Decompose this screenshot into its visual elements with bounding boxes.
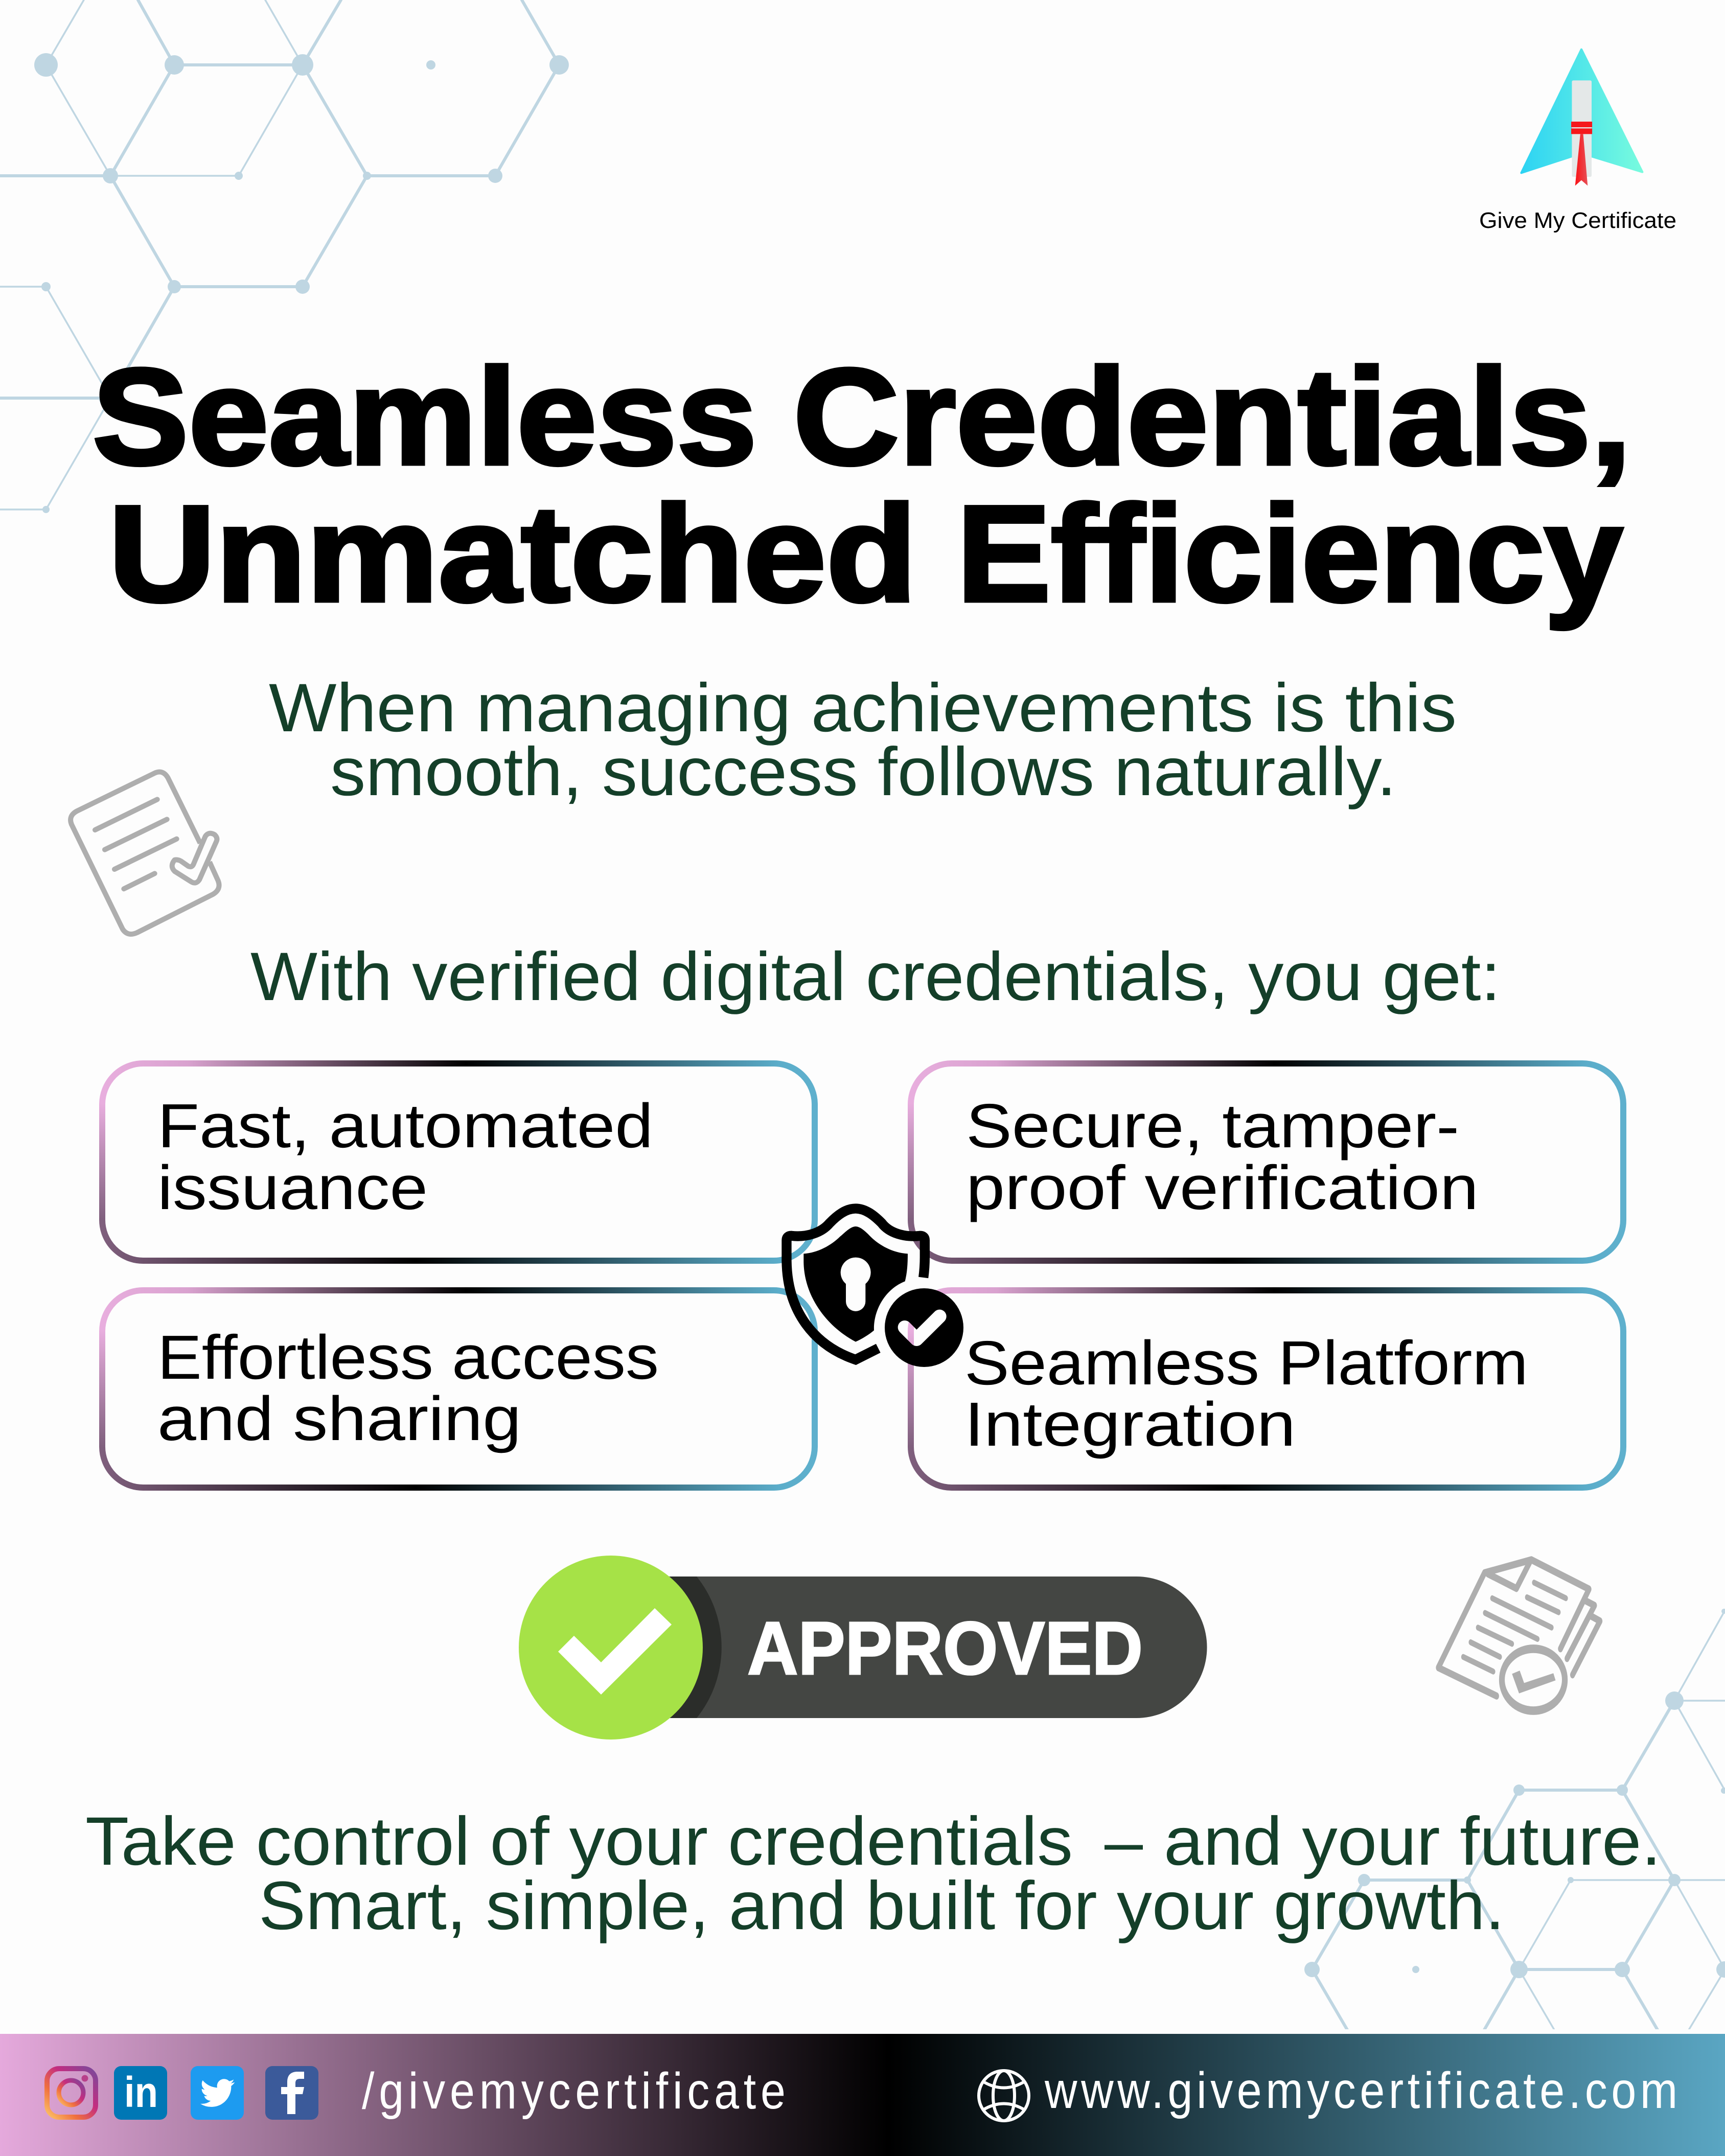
icon: facebook	[265, 2066, 318, 2120]
icon: approved documents	[1438, 1560, 1600, 1711]
social handle: /givemycertificate	[362, 2062, 786, 2119]
logo: Give My Certificate	[1479, 50, 1676, 233]
icon: security shield with lock and check	[787, 1209, 963, 1367]
title: Seamless	[93, 340, 757, 493]
panel: fast automated issuance: Fast, automated	[157, 1091, 653, 1161]
panel: seamless platform integration: Integration	[964, 1389, 1296, 1459]
subtitle: smooth, success follows naturally.	[330, 734, 1396, 810]
panel: fast automated issuance	[102, 1063, 815, 1261]
green check circle	[519, 1556, 703, 1740]
panel: secure verification	[911, 1063, 1623, 1261]
hexagon network: bottom right	[1304, 1609, 1725, 2033]
section heading: With verified digital credentials, you get:	[250, 939, 1501, 1015]
icon: twitter	[191, 2066, 244, 2120]
subtitle: When managing achievements is this	[269, 670, 1457, 746]
panel: seamless platform integration	[911, 1290, 1623, 1488]
closing text: and your future.	[1164, 1803, 1661, 1880]
closing text: Smart, simple, and built for your growth.	[259, 1868, 1505, 1944]
badge label: APPROVED	[747, 1607, 1143, 1690]
icon: instagram	[47, 2069, 96, 2117]
closing text: Take control of your credentials	[85, 1803, 1073, 1880]
panel: fast automated issuance: issuance	[157, 1153, 428, 1222]
approved badge	[519, 1556, 1207, 1740]
icon: linkedin: in	[124, 2068, 158, 2116]
panel: effortless access	[102, 1290, 815, 1488]
hexagon network: top left	[0, 0, 569, 513]
logo wordmark: Give My Certificate	[1479, 208, 1676, 233]
panel: secure verification: proof verification	[966, 1153, 1479, 1222]
panel: secure verification: Secure, tamper-	[966, 1091, 1459, 1161]
icon: checklist document	[71, 772, 219, 934]
title	[93, 340, 1631, 631]
title: Credentials,	[793, 340, 1631, 493]
badge shadow crescent	[664, 1577, 722, 1718]
subtitle	[269, 670, 1457, 810]
closing text: —	[1105, 1803, 1143, 1880]
icon: linkedin	[114, 2066, 167, 2120]
title: Unmatched	[108, 477, 917, 630]
footer bar	[0, 2034, 1725, 2156]
icon: paper plane with diploma scroll	[1521, 50, 1642, 186]
website url: www.givemycertificate.com	[1044, 2062, 1677, 2119]
panel: effortless access: Effortless access	[157, 1323, 659, 1392]
panel: effortless access: and sharing	[157, 1384, 521, 1453]
icon: check mark	[558, 1608, 672, 1695]
panel: seamless platform integration: Seamless Platform	[964, 1328, 1528, 1398]
icon: globe	[979, 2071, 1029, 2121]
closing text	[85, 1803, 1661, 1944]
badge pill	[664, 1577, 1207, 1718]
title: Efficiency	[957, 477, 1624, 631]
